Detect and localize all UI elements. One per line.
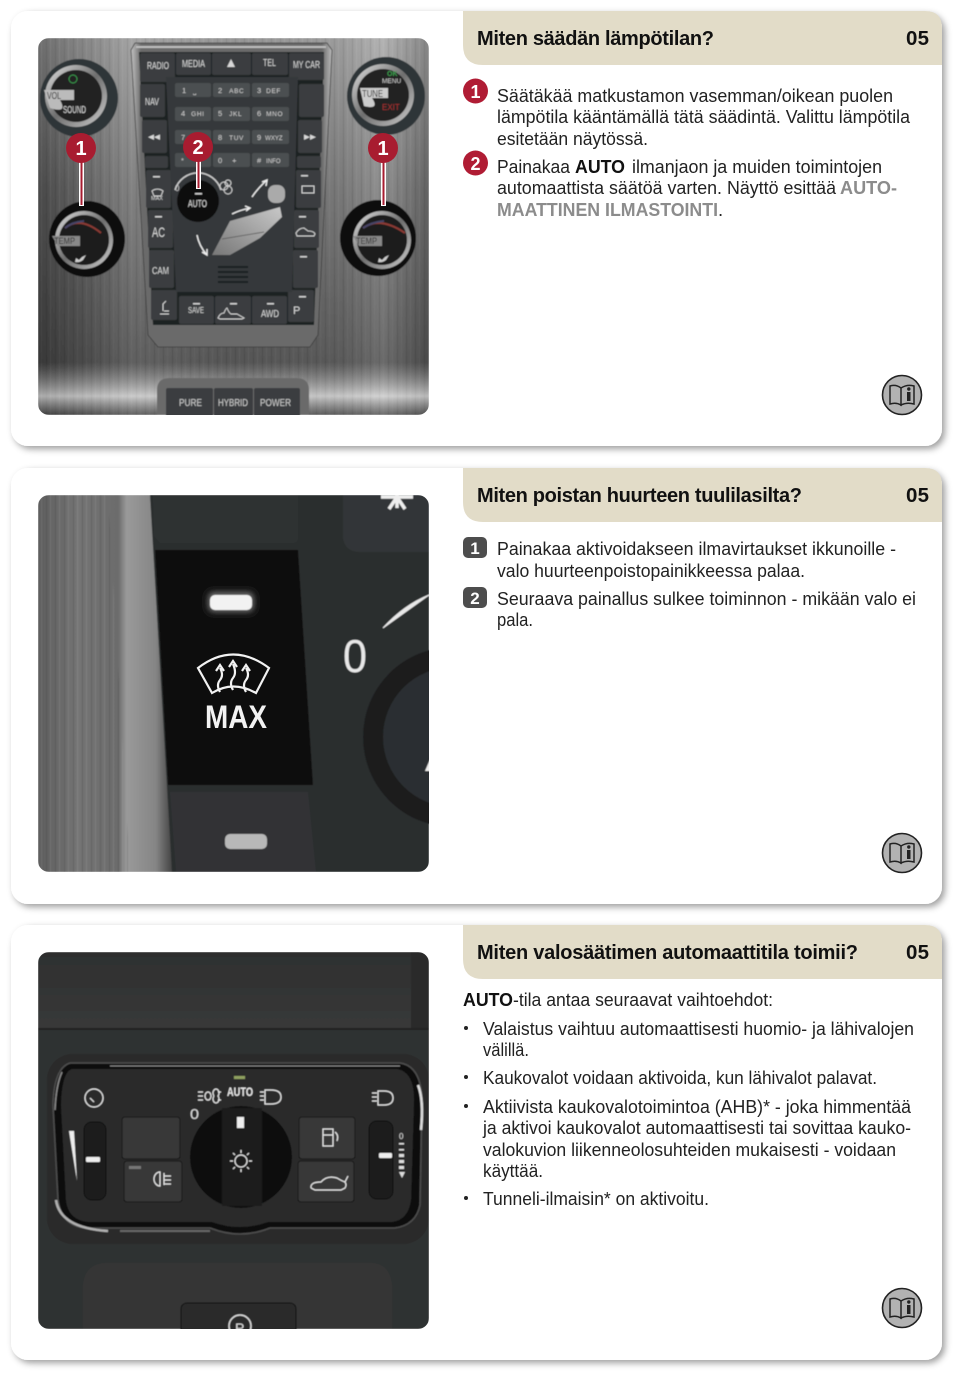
step 2 text [497,588,916,630]
bullet list: Valaistus vaihtuu automaattisesti huomio- ja lähivalojen [483,1018,914,1039]
photo: climate control panel: P [293,305,300,317]
photo: climate control panel [38,38,429,418]
step 1 badge: 1 [470,82,481,102]
step 2 text [497,156,897,220]
step 1 text: lämpötila kääntämällä tätä säädintä. Valittu lämpötila [497,106,911,127]
photo: climate control panel: NAV [145,97,159,108]
panel: light switch [11,925,942,1360]
photo: climate control panel: AWD [261,309,279,320]
section number: 05 [906,484,929,507]
photo: climate control panel: 4 GHI [181,109,205,118]
heading: Miten säädän lämpötilan? [477,28,714,50]
knobs: EXIT [382,103,400,112]
icon: manual info book [882,834,922,872]
step 2 text: Painakaa [497,156,571,177]
header bar [463,925,942,979]
step 2 text: AUTO [575,156,625,177]
step 1 badge [463,78,488,104]
step 2 text: ilmanjaon ja muiden toimintojen [632,156,882,177]
icon: manual info book [882,1288,922,1328]
photo: climate control panel: 7 [181,133,185,142]
photo: climate control panel: 8 TUV [218,133,244,142]
photo: climate control panel: RADIO [147,61,169,72]
photo: defrost button [38,495,429,872]
heading: Miten poistan huurteen tuulilasilta? [477,485,802,507]
bullet list: valokuvion liikenneolosuhteiden mukaisesti - voidaan [483,1139,896,1160]
photo: climate control panel: ▶▶ [304,134,317,141]
photo: climate control panel: 6 MNO [257,109,283,118]
step 1 text [497,538,896,581]
header bar [463,11,942,65]
step 1 text: Säätäkää matkustamon vasemman/oikean puolen [497,85,893,106]
photo: climate control panel: * [181,156,184,165]
step 1 badge: 1 [470,539,480,558]
step 2 text: pala. [497,609,533,630]
icon: windscreen defrost [198,654,269,693]
step 1 text [497,85,911,149]
step 2 badge: 2 [470,589,480,608]
intro text: AUTO [463,989,513,1010]
bullet list: ja aktivoi kaukovalot automaattisesti tai sovittaa kauko- [482,1117,911,1138]
photo: light control panel: AUTO [227,1087,253,1099]
knobs: VOL [47,91,61,102]
photo: climate control panel: ◀◀ [148,134,161,141]
card background [11,468,942,904]
callout badges: 1 [377,138,389,160]
photo: light control panel: 0 [190,1106,199,1123]
step 2 text: Seuraava painallus sulkee toiminnon - mikään valo ei [497,588,916,609]
photo: climate control panel: HYBRID [218,398,248,409]
photo: climate control panel: # INFO [257,156,281,165]
panel: defrost [11,468,942,904]
heading: Miten valosäätimen automaattitila toimii? [477,942,858,964]
bullet list: Aktiivista kaukovalotoimintoa (AHB)* - joka himmentää [483,1096,912,1117]
photo: climate control panel: AC [152,224,165,240]
knobs: TUNE [362,89,383,100]
step 2 text: . [718,199,723,220]
knobs: SOUND [63,105,86,116]
knobs: MENU [382,78,401,85]
bullet list: välillä. [483,1039,529,1060]
photo: climate control panel: PURE [179,398,202,409]
photo: defrost button: 0 [343,630,367,682]
section number: 05 [906,941,929,964]
step 2 text: automaattista säätöä varten. Näyttö esittää [497,177,837,198]
label: MAX: MAX [205,699,268,735]
section number: 05 [906,27,929,50]
knobs: TEMP [54,236,75,246]
intro text: -tila antaa seuraavat vaihtoehdot: [513,989,773,1010]
photo: climate control panel: CAM [152,266,169,277]
photo: light control panel [38,952,429,1343]
photo: climate control panel: 1 ⎵ [182,86,197,95]
photo: climate control panel: 3 DEF [257,86,281,95]
photo: climate control panel: 9 WXYZ [257,133,283,142]
photo: light control panel: P [235,1320,244,1336]
photo: light control panel: 0 [399,1132,404,1141]
icon: manual info book [882,376,922,414]
step 1 text: esitetään näytössä. [497,128,648,149]
header bar [463,468,942,522]
photo: climate control panel: AUTO [188,198,207,210]
callout badges: 1 [75,138,87,160]
step 1 text: valo huurteenpoistopainikkeessa palaa. [497,560,805,581]
bullet list: käyttää. [483,1160,543,1181]
photo: climate control panel: 2 ABC [218,86,244,95]
knobs [40,57,425,277]
step 2 badge: 2 [470,154,481,174]
photo: climate control panel: 0 [175,184,180,193]
photo: climate control panel: POWER [260,398,291,409]
step 2 text: MAATTINEN ILMASTOINTI [497,199,718,220]
callout badges [66,132,398,206]
card background [11,925,942,1360]
photo: climate control panel: 5 JKL [218,109,242,118]
card background [11,11,942,446]
photo: climate control panel: MAX [151,196,163,202]
photo: climate control panel: TEL [263,58,276,69]
photo: climate control panel: 0 + [218,156,237,165]
step 2 badge [463,150,488,176]
step 2 text: AUTO- [840,177,897,198]
bullet list: Tunneli-ilmaisin* on aktivoitu. [483,1188,709,1209]
knobs: OK [387,71,398,78]
step 2 badge [463,587,487,608]
bullet list [464,1018,914,1209]
step 1 badge [463,537,487,558]
knobs: TEMP [356,236,377,246]
photo: climate control panel: MY CAR [293,60,320,71]
photo: climate control panel: SAVE [188,306,204,315]
photo: climate control panel: MEDIA [182,59,205,70]
callout badges: 2 [192,137,204,159]
bullet list: Kaukovalot voidaan aktivoida, kun lähivalot palavat. [483,1067,877,1088]
step 1 text: Painakaa aktivoidakseen ilmavirtaukset ikkunoille - [497,538,896,559]
